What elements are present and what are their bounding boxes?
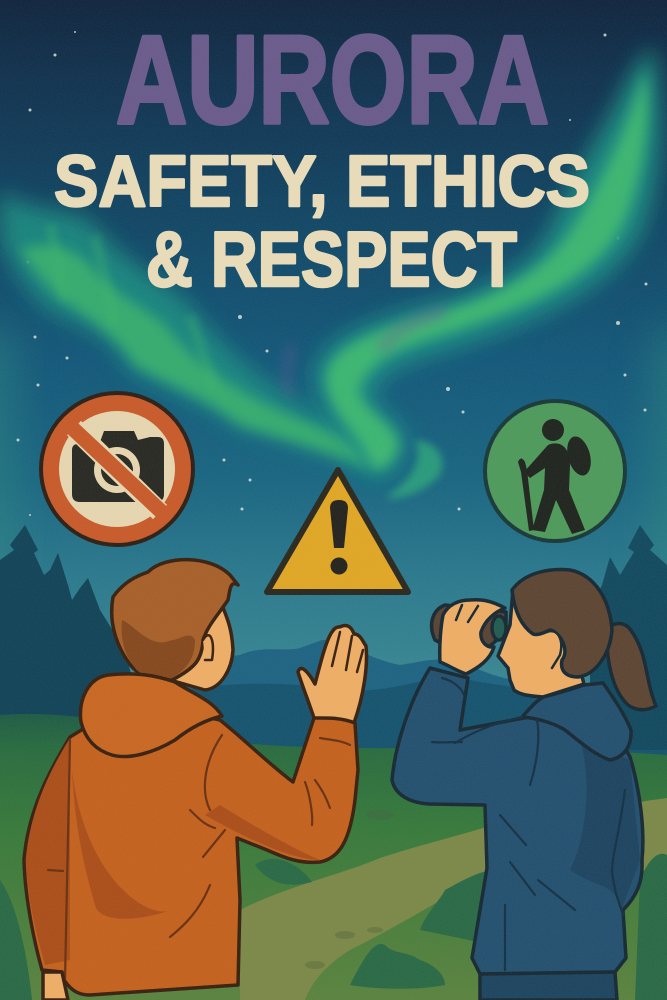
- man's jacket shade: [26, 738, 320, 965]
- icon: no camera sign: [41, 393, 193, 545]
- path: [239, 826, 490, 1000]
- meadow: [0, 714, 667, 1000]
- man's hand: [298, 625, 366, 723]
- aurora left band glow: [0, 190, 376, 475]
- aurora purple fringe: [287, 310, 445, 395]
- forest left: [0, 525, 135, 735]
- man's hand arm jacket: [24, 700, 358, 995]
- man's hair: [112, 560, 238, 680]
- aurora right band glow: [314, 45, 661, 476]
- woman's finger lines: [456, 605, 478, 622]
- person: man in orange hoodie: [24, 560, 366, 1000]
- mountains: [100, 640, 667, 780]
- aurora right band green: [327, 70, 647, 469]
- man's hood: [80, 674, 222, 757]
- woman's ear: [547, 631, 561, 668]
- man's jacket lines: [48, 735, 350, 980]
- hiker figure: [518, 419, 595, 534]
- person: woman with binoculars: [392, 570, 656, 1000]
- camera body: [72, 431, 164, 502]
- aurora left streaks: [50, 225, 215, 390]
- woman's jacket lines: [432, 678, 625, 970]
- woman's jacket: [392, 668, 643, 974]
- man's ear: [203, 635, 213, 660]
- icon: warning triangle: [267, 470, 408, 592]
- title line: & RESPECT: & RESPECT: [146, 215, 517, 303]
- woman's hair: [512, 570, 612, 677]
- aurora curl: [385, 440, 442, 498]
- man's hair shade: [122, 620, 195, 678]
- binoculars: [432, 605, 506, 646]
- woman's face and neck: [498, 590, 584, 697]
- title line: SAFETY, ETHICS: SAFETY, ETHICS: [54, 142, 590, 222]
- man's wrist: [43, 972, 68, 1000]
- woman's jacket shade: [570, 740, 640, 908]
- man's neck and face: [170, 605, 233, 690]
- ponytail: [607, 624, 656, 710]
- man's finger lines: [332, 632, 363, 672]
- path far right: [630, 798, 667, 875]
- aurora left band green: [20, 245, 368, 468]
- title: [54, 11, 590, 303]
- prohibition slash: [74, 428, 160, 512]
- woman's hand: [440, 600, 505, 674]
- stars: [16, 31, 648, 516]
- bushes: [0, 810, 667, 1000]
- woman's hood: [522, 683, 631, 760]
- forest right: [590, 525, 667, 750]
- aurora: [0, 45, 661, 498]
- woman's trousers: [480, 972, 617, 1000]
- title line: AURORA: AURORA: [116, 11, 549, 150]
- icon: hiker sign: [485, 401, 625, 541]
